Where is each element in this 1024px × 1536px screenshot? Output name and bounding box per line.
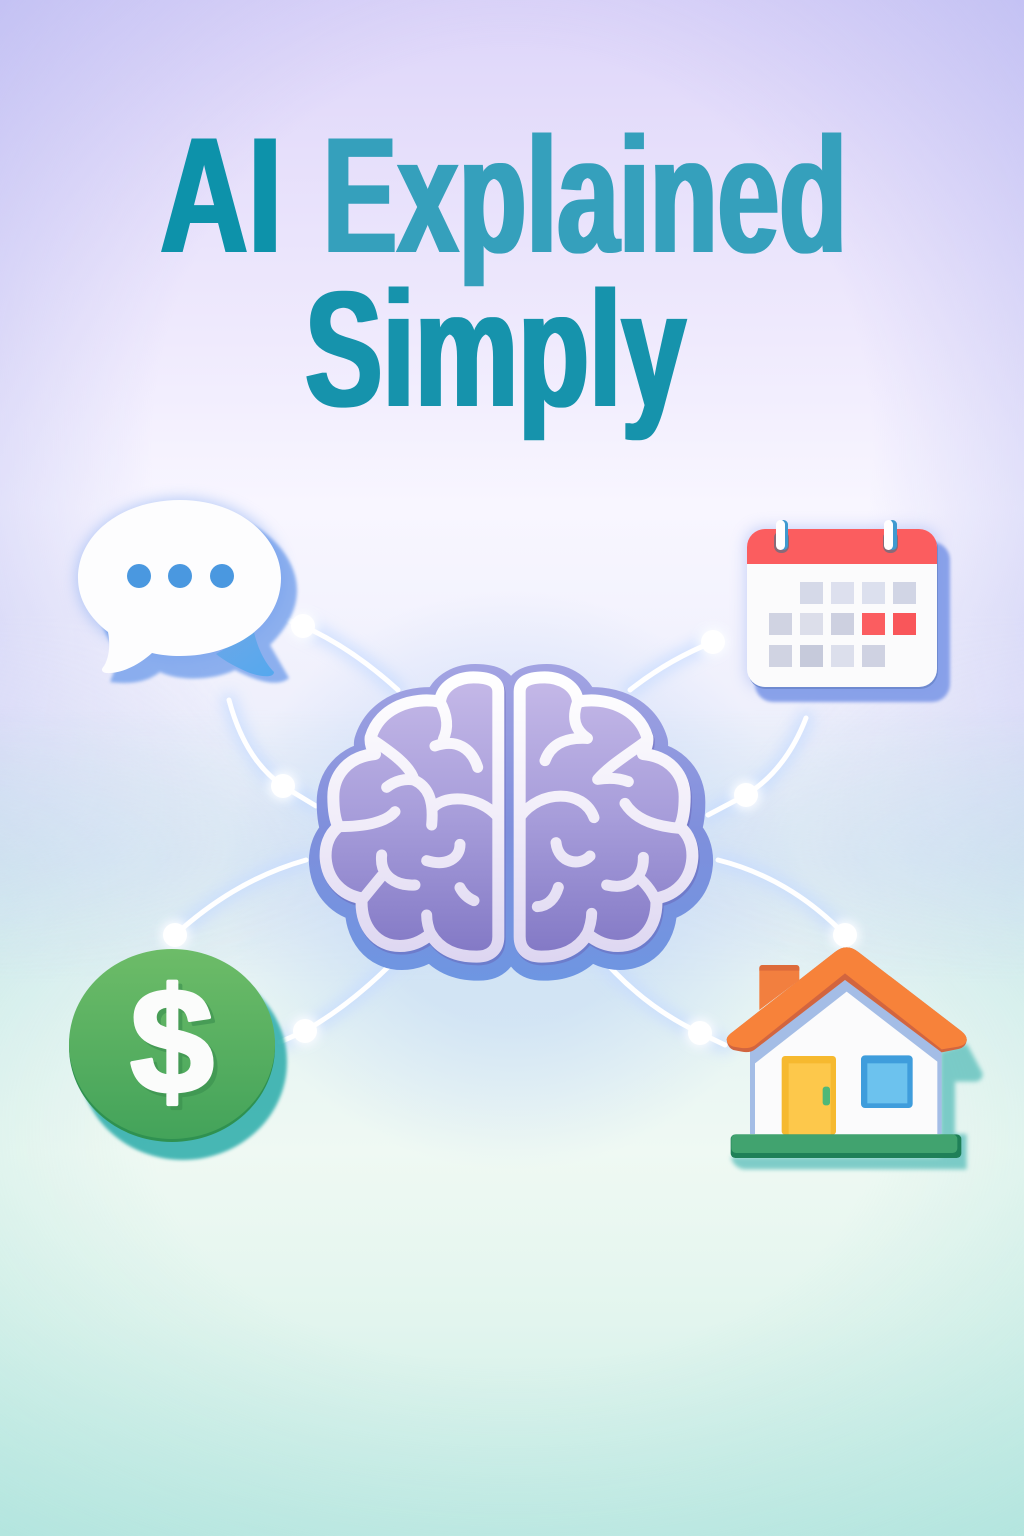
icon: brain <box>326 677 694 962</box>
door <box>782 1056 836 1135</box>
white bubble <box>78 500 281 673</box>
wall frame <box>750 980 942 1134</box>
connector glow <box>175 626 845 1045</box>
binder rings <box>774 520 898 553</box>
house shadow <box>731 1043 983 1169</box>
roof <box>727 947 967 1052</box>
ground <box>731 1134 961 1158</box>
brain halo <box>328 683 694 962</box>
coin shadow <box>79 964 287 1160</box>
icon: chat bubble <box>76 498 297 683</box>
icon: house <box>727 947 983 1169</box>
calendar body <box>747 529 937 687</box>
connectors <box>175 620 845 1045</box>
icon: calendar <box>745 520 950 702</box>
coin edge <box>69 952 275 1142</box>
bubble shadow <box>95 510 297 683</box>
typing dots <box>127 564 234 588</box>
connector nodes <box>160 611 860 1048</box>
bubble glow <box>76 498 284 658</box>
connector lines <box>175 620 845 1045</box>
wall <box>755 992 937 1134</box>
icon: dollar coin <box>69 949 287 1160</box>
chimney <box>759 965 799 1010</box>
date cells <box>769 582 916 667</box>
title word: Simply: Simply <box>305 257 686 441</box>
window <box>861 1055 913 1108</box>
calendar header <box>747 529 937 564</box>
title word: AI: AI <box>160 103 282 287</box>
dollar sign: $ <box>130 957 214 1125</box>
coin face <box>69 949 275 1139</box>
right hemisphere <box>520 677 692 957</box>
dollar sign shadow: $ <box>134 961 218 1129</box>
blue tail <box>216 632 274 676</box>
brain shadow <box>327 680 694 959</box>
calendar shadow <box>755 542 950 702</box>
title <box>160 103 847 441</box>
left hemisphere <box>326 677 498 957</box>
calendar glow <box>745 527 939 689</box>
